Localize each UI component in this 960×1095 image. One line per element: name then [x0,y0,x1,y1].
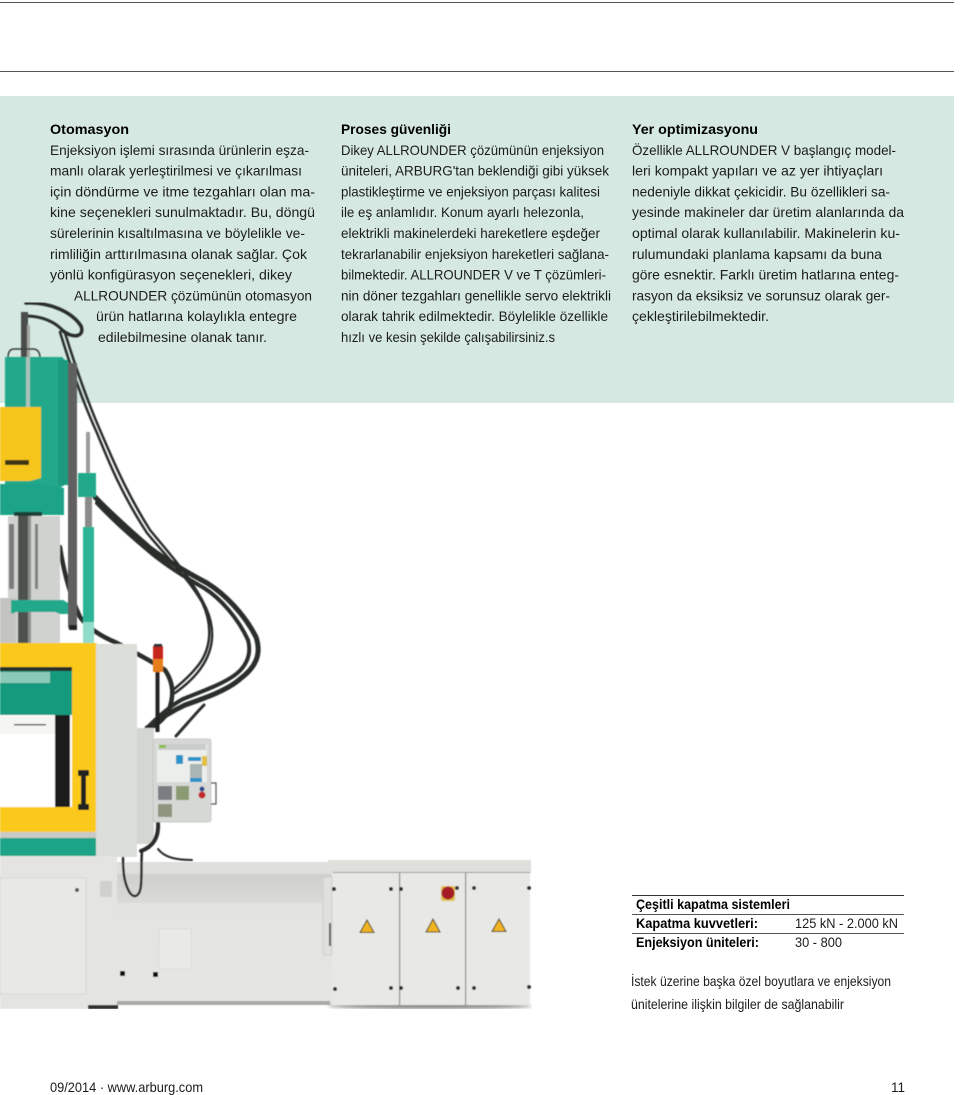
text column: Otomasyon: kine seçenekleri sunulmaktadır. Bu, döngü [50,204,315,220]
text column: Otomasyon: Otomasyon [50,121,129,137]
specification table: Çeşitli kapatma sistemleri [636,896,790,912]
note text: ünitelerine ilişkin bilgiler de sağlanabilir [631,996,844,1012]
specification table [632,895,904,950]
text column: Yer optimizasyonu: optimal olarak kullanılabilir. Makinelerin ku- [632,225,900,241]
panel: mint background [0,96,954,403]
text column: Yer optimizasyonu: Özellikle ALLROUNDER V başlangıç model- [632,141,896,158]
text column: Proses güvenliği: tekrarlanabilir enjeksiyon hareketleri sağlana- [341,246,609,262]
text column: Proses güvenliği [341,121,611,345]
text column: Proses güvenliği: ile eş anlamlıdır. Konum ayarlı helezonla, [341,204,584,220]
icon: red main switch [441,886,455,901]
text column: Proses güvenliği: nin döner tezgahları genellikle servo elektrikli [341,287,611,303]
machine base [0,856,332,1009]
signal beacon [153,644,163,732]
lower hoses [123,822,192,896]
text column: Proses güvenliği: elektrikli makinelerdeki hareketlere eşdeğer [341,225,600,241]
grey guides [8,516,60,644]
text column: Proses güvenliği: üniteleri, ARBURG'tan beklendiği gibi yüksek [341,163,610,179]
text column: Yer optimizasyonu: rasyon da eksiksiz ve sorunsuz olarak ger- [632,287,890,303]
specification table: 125 kN - 2.000 kN [795,915,898,931]
yellow clamping frame [0,643,97,856]
text column: Proses güvenliği: Dikey ALLROUNDER çözümünün enjeksiyon [341,142,604,158]
text column: Otomasyon: sürelerinin kısaltılmasına ve böylelikle ve- [50,225,305,241]
text column: Otomasyon: yönlü konfigürasyon seçenekleri, dikey [50,267,292,283]
text column: Otomasyon: rimliliğin arttırılmasına olanak sağlar. Çok [50,246,308,262]
text column: Otomasyon: manlı olarak yerleştirilmesi ve çıkarılması [50,163,302,179]
text column: Proses güvenliği: Proses güvenliği [341,121,451,137]
text column: Otomasyon [50,121,315,345]
control panel [153,739,216,822]
text column: Yer optimizasyonu: Yer optimizasyonu [632,121,758,137]
upper injection column [0,312,96,644]
text column: Otomasyon: edilebilmesine olanak tanır. [98,329,267,345]
text column: Proses güvenliği: plastikleştirme ve enjeksiyon parçası kalitesi [341,183,600,199]
note text: İstek üzerine başka özel boyutlara ve enjeksiyon [631,972,891,989]
machine illustration [0,303,532,1009]
yellow cover [0,407,41,481]
green block [0,484,64,515]
top rules [0,2,954,72]
footer [50,1079,905,1095]
footer: 09/2014 · www.arburg.com [50,1079,203,1095]
icon: warning triangles [360,919,506,932]
text column: Yer optimizasyonu [632,121,904,324]
text column: Yer optimizasyonu: nedeniyle dikkat çekicidir. Bu özellikleri sa- [632,183,890,199]
text column: Otomasyon: Enjeksiyon işlemi sırasında ürünlerin eşza- [50,142,309,158]
rods and bracket [86,432,90,527]
text column: Yer optimizasyonu: leri kompakt yapıları ve az yer ihtiyaçları [632,163,883,179]
grey vertical column [96,644,154,857]
text column: Yer optimizasyonu: göre esnektir. Farklı üretim hatlarına enteg- [632,267,899,283]
note text [631,972,891,1012]
rear hoses [26,303,258,736]
text column: Proses güvenliği: bilmektedir. ALLROUNDER V ve T çözümleri- [341,267,606,283]
electrical cabinets [323,860,532,1009]
text column: Proses güvenliği: olarak tahrik edilmektedir. Böylelikle özellikle [341,308,608,324]
text column: Otomasyon: ürün hatlarına kolaylıkla entegre [96,308,297,324]
text column: Otomasyon: için döndürme ve itme tezgahları olan ma- [50,183,315,199]
text column: Yer optimizasyonu: çekleştirilebilmektedir. [632,308,769,324]
specification table: Enjeksiyon üniteleri: [636,934,759,950]
footer: 11 [891,1079,905,1095]
text column: Yer optimizasyonu: rulumundaki planlama kapsamı da buna [632,246,882,262]
green clamp [11,600,68,614]
text column: Yer optimizasyonu: yesinde makineler dar üretim alanlarında da [632,204,904,220]
text column: Otomasyon: ALLROUNDER çözümünün otomasyon [74,287,312,303]
specification table: Kapatma kuvvetleri: [636,915,758,931]
specification table: 30 - 800 [795,934,842,950]
text column: Proses güvenliği: hızlı ve kesin şekilde çalışabilirsiniz.s [341,329,555,345]
